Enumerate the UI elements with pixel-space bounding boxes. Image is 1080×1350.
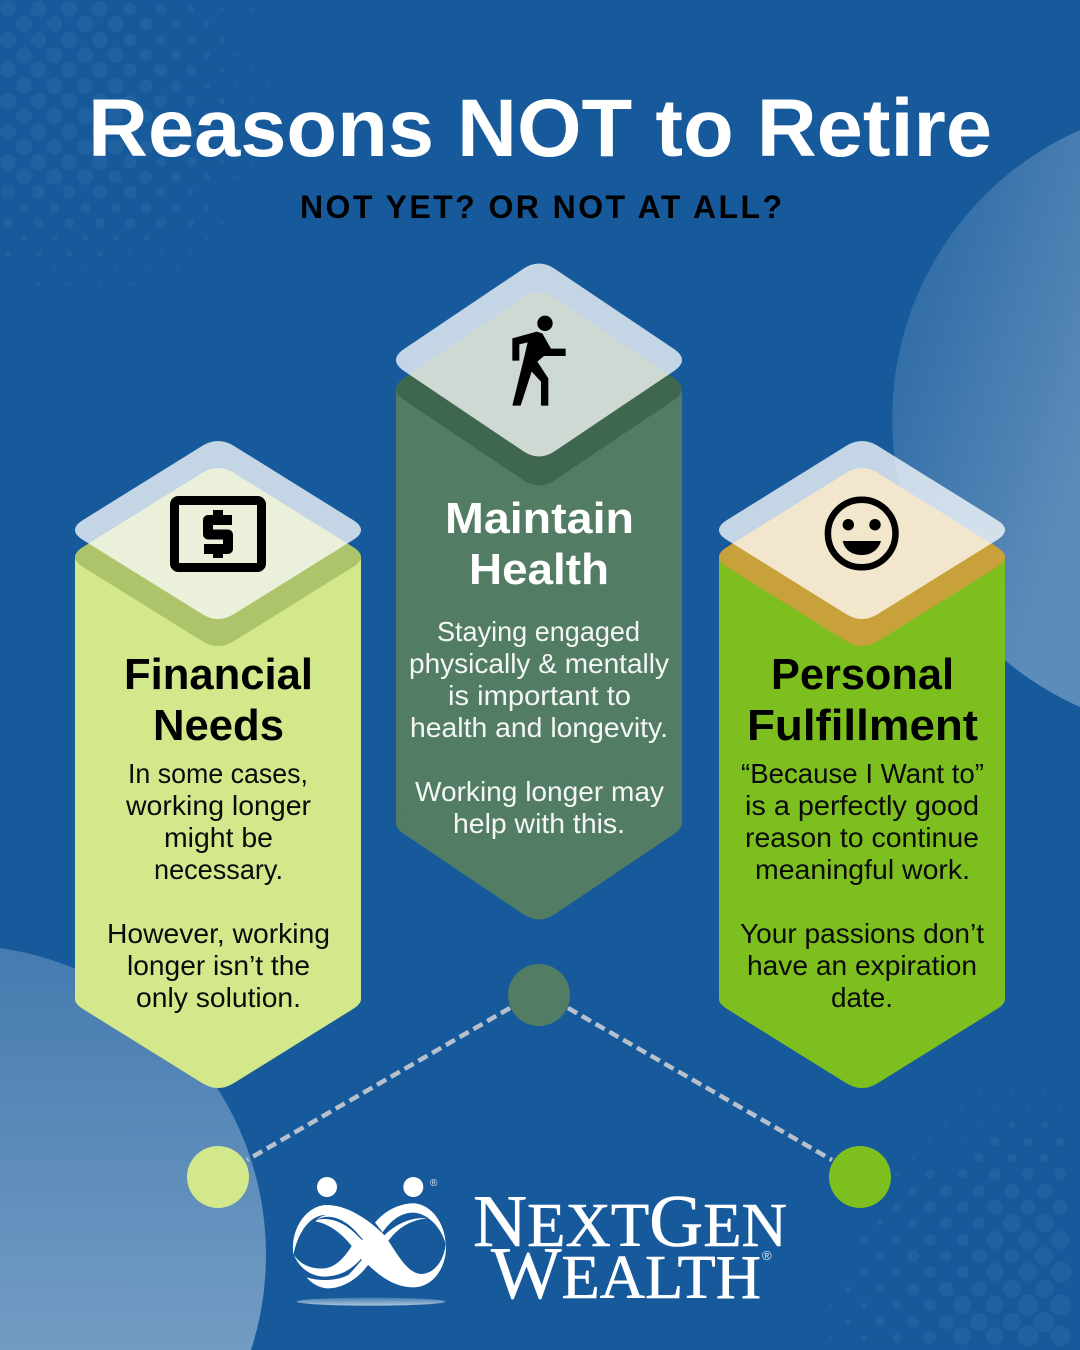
logo wordmark: NextGen: NEXTGEN <box>473 1181 787 1263</box>
text: personal fulfillment body: meaningful work. <box>755 854 970 885</box>
heading: financial needs: Financial <box>124 650 313 699</box>
text: financial needs body <box>107 758 330 1013</box>
text: personal fulfillment body: “Because I Want to” <box>741 758 984 789</box>
background circle: lower left <box>0 948 266 1350</box>
dot: fulfillment <box>829 1146 891 1208</box>
background circle: upper right <box>892 130 1080 707</box>
text: financial needs body: might be <box>164 822 273 853</box>
text: personal fulfillment body: reason to continue <box>745 822 979 853</box>
text: financial needs body: In some cases, <box>128 758 308 789</box>
heading: personal fulfillment <box>747 650 978 750</box>
heading: personal fulfillment: Fulfillment <box>747 701 978 750</box>
text: maintain health body: Staying engaged <box>437 616 640 647</box>
panel: financial needs <box>75 441 361 1088</box>
heading: personal fulfillment: Personal <box>771 650 954 699</box>
dot: financial <box>187 1146 249 1208</box>
heading: maintain health <box>445 494 634 594</box>
logo registered mark: wordmark: ® <box>762 1248 772 1263</box>
logo: NextGen Wealth <box>293 1177 787 1315</box>
text: maintain health body: help with this. <box>453 808 625 839</box>
text: maintain health body: Working longer may <box>415 776 664 807</box>
heading: financial needs <box>124 650 313 750</box>
icon: dollar bill <box>174 500 262 568</box>
text: maintain health body: is important to <box>448 680 631 711</box>
text: financial needs body: working longer <box>125 790 311 821</box>
text: personal fulfillment body: is a perfectly good <box>745 790 979 821</box>
panel: personal fulfillment <box>719 441 1005 1088</box>
text: personal fulfillment body: date. <box>831 982 893 1013</box>
text: financial needs body: longer isn’t the <box>127 950 310 981</box>
logo registered mark: icon: ® <box>430 1178 438 1189</box>
text: maintain health body: health and longevity. <box>410 712 668 743</box>
logo wordmark: Wealth: WEALTH <box>491 1233 761 1315</box>
connector: dashed line to fulfillment dot <box>568 1008 832 1160</box>
text: maintain health body <box>409 616 669 839</box>
dot: health <box>508 964 570 1026</box>
heading: financial needs: Needs <box>153 701 284 750</box>
text: personal fulfillment body: have an expiration <box>747 950 977 981</box>
text: maintain health body: physically & mentally <box>409 648 669 679</box>
text: financial needs body: only solution. <box>136 982 301 1013</box>
icon: smiley face <box>828 500 896 567</box>
icon: walking person <box>512 316 566 406</box>
text: personal fulfillment body: Your passions don’t <box>740 918 984 949</box>
heading: maintain health: Maintain <box>445 494 634 543</box>
text: financial needs body: However, working <box>107 918 330 949</box>
text: personal fulfillment body <box>740 758 984 1013</box>
title: Reasons NOT to Retire <box>88 83 992 174</box>
panel: maintain health <box>396 264 682 920</box>
subtitle: NOT YET? OR NOT AT ALL? <box>300 189 782 225</box>
heading: maintain health: Health <box>469 545 609 594</box>
connector: dashed line to financial dot <box>247 1008 510 1160</box>
logo icon: two figures and infinity ribbon <box>293 1177 446 1306</box>
text: financial needs body: necessary. <box>154 854 283 885</box>
